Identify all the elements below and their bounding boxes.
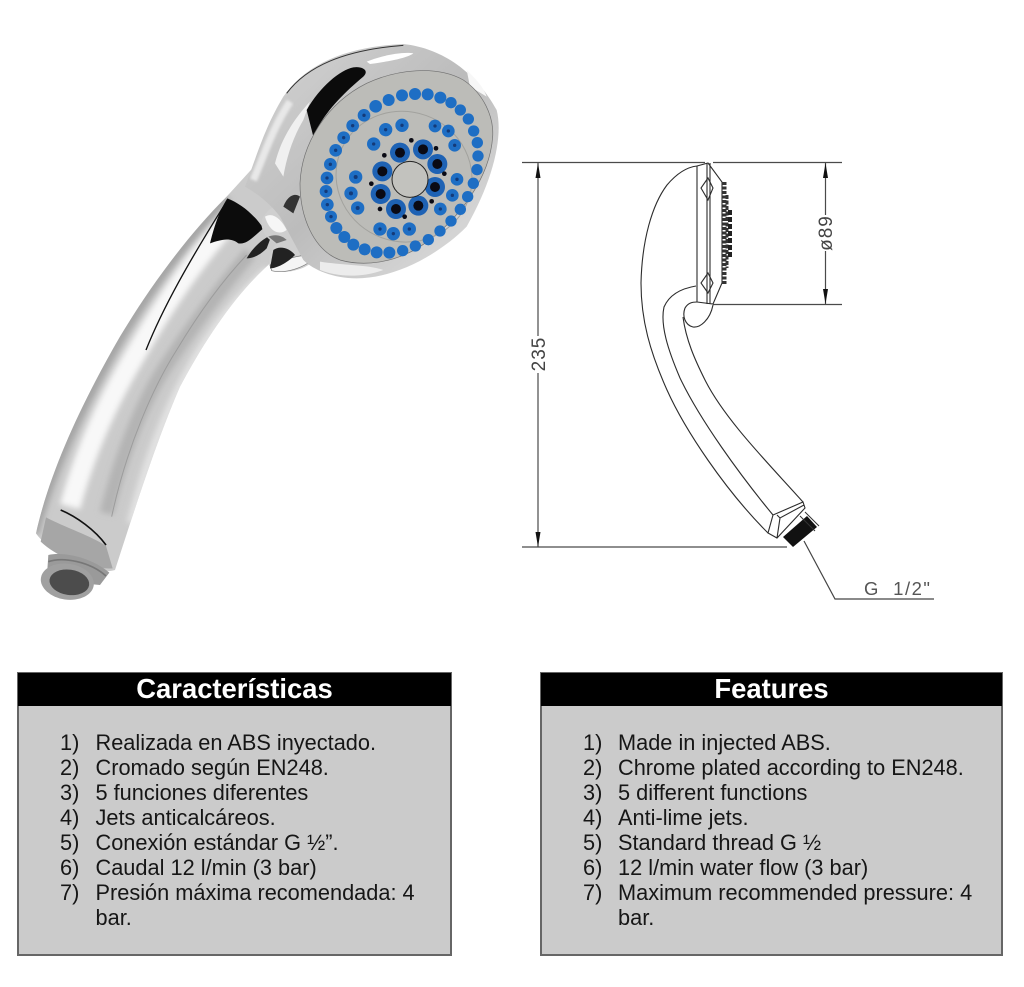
feature list in Spanish: 2)	[60, 755, 79, 780]
heading: Características: Características	[136, 673, 333, 704]
feature list in English: Anti-lime jets.	[618, 805, 749, 830]
feature list in English: 5 different functions	[618, 780, 807, 805]
feature list in English: Chrome plated according to EN248.	[618, 755, 964, 780]
feature list in Spanish	[60, 730, 415, 930]
feature list in English: bar.	[618, 905, 654, 930]
dimension arrowheads	[536, 163, 828, 547]
heading: Features	[541, 673, 1002, 706]
feature list in English	[583, 730, 972, 930]
feature list in Spanish: 3)	[60, 780, 79, 805]
dimension label 235: 235	[529, 337, 550, 371]
shower head	[245, 44, 499, 278]
feature list in Spanish: Cromado según EN248.	[96, 755, 329, 780]
feature list in Spanish: Realizada en ABS inyectado.	[96, 730, 376, 755]
shower profile outline	[641, 163, 805, 538]
outer jets	[320, 88, 484, 259]
feature list in Spanish: Presión máxima recomendada: 4	[96, 880, 415, 905]
dimension label diameter 89: ø89	[816, 215, 837, 251]
feature list in English: 7)	[583, 880, 602, 905]
thread leader line	[804, 541, 934, 599]
feature list in Spanish: Conexión estándar G ½”.	[96, 830, 339, 855]
feature list in English: 5)	[583, 830, 602, 855]
shower handle	[33, 160, 320, 603]
thread size label: G 1/2"	[864, 578, 931, 599]
panel: Features	[540, 672, 1003, 956]
hook bracket	[261, 206, 317, 272]
feature list in English: Made in injected ABS.	[618, 730, 831, 755]
dimension lines	[522, 162, 842, 547]
panel: Características	[17, 672, 452, 956]
feature list in Spanish: Caudal 12 l/min (3 bar)	[96, 855, 317, 880]
feature list in English: 6)	[583, 855, 602, 880]
spray face jets in profile	[724, 182, 730, 285]
heading: Características	[18, 673, 451, 706]
feature list in English: 3)	[583, 780, 602, 805]
product illustration: chrome shower head photo	[36, 44, 499, 600]
centre button	[392, 161, 428, 197]
feature list in Spanish: 7)	[60, 880, 79, 905]
feature list in English: 2)	[583, 755, 602, 780]
feature list in Spanish: bar.	[96, 905, 132, 930]
feature list in English: Maximum recommended pressure: 4	[618, 880, 972, 905]
feature list in English: 12 l/min water flow (3 bar)	[618, 855, 868, 880]
heading: Features: Features	[714, 673, 829, 704]
grey spray face	[300, 71, 493, 263]
feature list in Spanish: 4)	[60, 805, 79, 830]
feature list in Spanish: Jets anticalcáreos.	[96, 805, 276, 830]
feature list in English: 4)	[583, 805, 602, 830]
feature list in Spanish: 5)	[60, 830, 79, 855]
feature list in Spanish: 5 funciones diferentes	[96, 780, 308, 805]
feature list in Spanish: 1)	[60, 730, 79, 755]
chrome body	[245, 44, 499, 278]
jet centres	[324, 114, 459, 235]
threaded connector	[38, 510, 113, 603]
threaded connector	[783, 512, 819, 547]
feature list in English: 1)	[583, 730, 602, 755]
inner large jets	[371, 139, 447, 219]
feature list in English: Standard thread G ½	[618, 830, 821, 855]
feature list in Spanish: 6)	[60, 855, 79, 880]
